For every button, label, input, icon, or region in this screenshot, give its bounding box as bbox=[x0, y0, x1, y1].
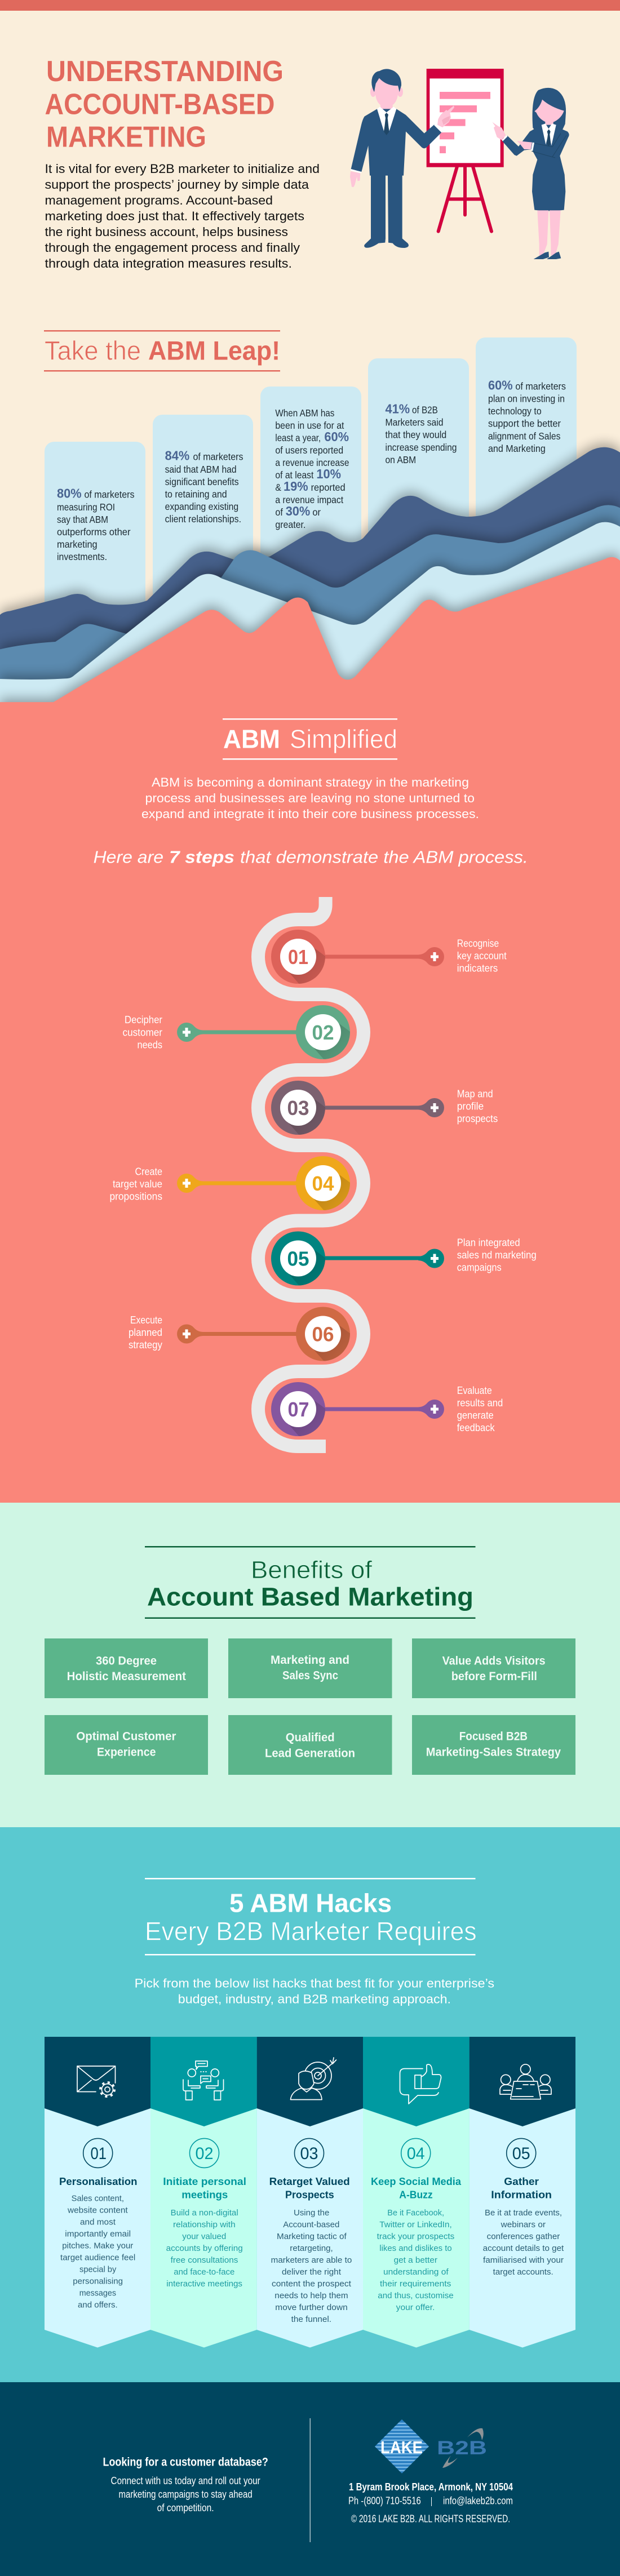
heading: Take the ABM Leap: Take the bbox=[45, 336, 141, 365]
intro paragraph: marketing does just that. It effectively targets bbox=[45, 209, 304, 223]
step 03: profile bbox=[457, 1100, 484, 1112]
hack 03: Retarget Valued Prospects: content the prospect bbox=[272, 2280, 351, 2289]
step 04 bbox=[109, 1156, 358, 1225]
hack 02: Initiate personal meetings: interactive meetings bbox=[166, 2280, 242, 2289]
benefit: Focused B2B Marketing-Sales Strategy bbox=[412, 1715, 575, 1775]
intro paragraph: support the prospects’ journey by simple data bbox=[45, 177, 309, 192]
hack 05: Gather Information: familiarised with your bbox=[483, 2256, 564, 2265]
hack 05: Gather Information: 05 bbox=[512, 2144, 530, 2163]
step 02: needs bbox=[138, 1039, 162, 1051]
card: 60% 10% 19% 30%: 10% bbox=[316, 467, 341, 481]
hack 01: Personalisation: Sales content, bbox=[72, 2194, 124, 2203]
hack 04: Keep Social Media A-Buzz: your offer. bbox=[396, 2303, 435, 2312]
card: 84%: 84% bbox=[165, 448, 189, 463]
intro paragraph bbox=[45, 162, 320, 270]
hack 05: Gather Information bbox=[470, 2037, 575, 2347]
card: 60% 10% 19% 30%: a revenue impact bbox=[275, 494, 343, 505]
card: 80% bbox=[45, 442, 145, 667]
hack 03: Retarget Valued Prospects: move further down bbox=[275, 2303, 348, 2312]
contact details bbox=[348, 2481, 513, 2524]
icon: flip chart bbox=[427, 69, 504, 232]
hack 03: Retarget Valued Prospects: Using the bbox=[294, 2209, 329, 2218]
section background: intro cream bbox=[0, 0, 620, 732]
subheading: 7 steps: Here are bbox=[94, 847, 163, 867]
benefit: Marketing and Sales Sync bbox=[228, 1638, 392, 1698]
hack 05: Gather Information: conferences gather bbox=[487, 2232, 560, 2241]
intro paragraph: through data integration measures results. bbox=[45, 256, 292, 270]
card: 60% 10% 19% 30%: reported bbox=[311, 482, 346, 493]
card: 60% 10% 19% 30%: a revenue increase bbox=[275, 457, 349, 468]
hack 03: Retarget Valued Prospects: marketers are able to bbox=[271, 2256, 352, 2265]
intro paragraph: management programs. Account-based bbox=[45, 193, 273, 207]
subheading: 7 steps bbox=[94, 847, 528, 867]
step 01: Recognise bbox=[457, 938, 499, 949]
panel: ABM Simplified bbox=[0, 716, 620, 1503]
hack 01: Personalisation: personalising bbox=[73, 2277, 123, 2286]
card: 84%: said that ABM had bbox=[165, 464, 237, 475]
benefit: Optimal Customer Experience: Experience bbox=[97, 1746, 156, 1759]
hack 02: Initiate personal meetings: your valued bbox=[182, 2232, 226, 2241]
step 01: indicaters bbox=[457, 962, 498, 974]
card: 41% bbox=[368, 358, 469, 584]
hack 05: Gather Information: target accounts. bbox=[493, 2268, 553, 2277]
hack 01: Personalisation: website content bbox=[67, 2206, 128, 2215]
hack 04: Keep Social Media A-Buzz: Be it Facebook, bbox=[387, 2209, 444, 2218]
panel: Benefits bbox=[0, 1503, 620, 1827]
benefit: Marketing and Sales Sync: Sales Sync bbox=[282, 1669, 338, 1682]
step 07: feedback bbox=[457, 1422, 495, 1433]
step 07: Evaluate bbox=[457, 1384, 492, 1396]
hack 04: Keep Social Media A-Buzz: understanding of bbox=[383, 2268, 449, 2277]
card: 84%: client relationships. bbox=[165, 513, 241, 525]
step 06: Execute bbox=[130, 1314, 162, 1326]
card: 80%: investments. bbox=[57, 551, 107, 562]
heading: ABM Simplified bbox=[223, 718, 397, 760]
hack 05: Gather Information: Be it at trade events, bbox=[485, 2209, 562, 2218]
card: 41%: 41% bbox=[386, 402, 410, 416]
card: 60% alignment: alignment of Sales bbox=[488, 430, 561, 442]
hack 05: Gather Information: webinars or bbox=[501, 2220, 546, 2229]
card: 84%: significant benefits bbox=[165, 476, 239, 487]
hack 03: Retarget Valued Prospects: the funnel. bbox=[291, 2315, 331, 2324]
hack 03: Retarget Valued Prospects bbox=[257, 2037, 363, 2347]
step 03: 03 bbox=[287, 1096, 309, 1120]
card: 60% alignment: 60% bbox=[488, 378, 513, 393]
hack 02: Initiate personal meetings: 02 bbox=[195, 2144, 213, 2163]
hack 01: Personalisation: Personalisation bbox=[59, 2176, 138, 2187]
card: 84%: to retaining and bbox=[165, 488, 227, 500]
heading: ABM Simplified: Simplified bbox=[290, 725, 397, 754]
heading: 5 ABM Hacks bbox=[145, 1878, 477, 1955]
hack 01: Personalisation bbox=[45, 2037, 150, 2347]
hack 04: Keep Social Media A-Buzz: their requirements bbox=[380, 2280, 451, 2289]
hack 03: Retarget Valued Prospects: Retarget Valued bbox=[269, 2176, 350, 2187]
card: 80%: 80% bbox=[57, 486, 82, 501]
heading: Take the ABM Leap bbox=[44, 330, 280, 372]
chart: layered mountains bbox=[0, 447, 620, 728]
intro paragraph: through the engagement process and finally bbox=[45, 241, 300, 255]
hack 03: Retarget Valued Prospects: needs to help them bbox=[274, 2291, 348, 2300]
stat cards bbox=[45, 337, 577, 667]
step 02: Decipher bbox=[125, 1014, 162, 1025]
card: 60% 10% 19% 30%: of at least bbox=[275, 469, 314, 481]
hack 05: Gather Information: account details to get bbox=[483, 2244, 564, 2253]
hack 02: Initiate personal meetings: meetings bbox=[181, 2189, 228, 2200]
card: 60% alignment: of marketers bbox=[515, 381, 566, 392]
step 07 bbox=[271, 1382, 503, 1451]
panel: Take the ABM Leap bbox=[0, 330, 620, 728]
hack 01: Personalisation: messages bbox=[79, 2289, 116, 2298]
step 02: customer bbox=[123, 1027, 162, 1038]
hack 04: Keep Social Media A-Buzz: A-Buzz bbox=[399, 2189, 433, 2200]
hack 01: Personalisation: and most bbox=[80, 2218, 116, 2227]
call to action: of competition. bbox=[157, 2502, 214, 2513]
logo: Lake B2B: B2B bbox=[437, 2437, 487, 2459]
step 05: Plan integrated bbox=[457, 1237, 520, 1249]
benefit: 360 Degree Holistic Measurement: 360 Degree bbox=[96, 1655, 157, 1668]
card: 60% 10% 19% 30% bbox=[260, 387, 361, 612]
step 04: target value bbox=[113, 1178, 162, 1189]
title bbox=[45, 55, 284, 153]
intro text: budget, industry, and B2B marketing approach. bbox=[178, 1992, 451, 2006]
icon: envelope with gear bbox=[77, 2066, 115, 2097]
card: 80%: say that ABM bbox=[57, 514, 108, 525]
card: 60% alignment: plan on investing in bbox=[488, 393, 565, 405]
card: 41%: Marketers said bbox=[386, 417, 443, 428]
card: 60% 10% 19% 30%: of bbox=[275, 507, 283, 518]
benefit: Qualified Lead Generation: Lead Generation bbox=[265, 1747, 355, 1760]
benefit: Qualified Lead Generation bbox=[228, 1715, 392, 1775]
card: 60% alignment bbox=[476, 337, 577, 563]
intro paragraph: the right business account, helps business bbox=[45, 225, 288, 239]
card: 60% 10% 19% 30%: 19% bbox=[284, 479, 308, 494]
hack 03: Retarget Valued Prospects: Marketing tactic of bbox=[277, 2232, 347, 2241]
hack 04: Keep Social Media A-Buzz: Twitter or LinkedIn, bbox=[379, 2220, 452, 2229]
intro text bbox=[135, 1976, 494, 2006]
heading: 5 ABM Hacks: Every B2B Marketer Requires bbox=[145, 1916, 477, 1946]
hack 03: Retarget Valued Prospects: 03 bbox=[300, 2144, 318, 2163]
panel: footer bbox=[0, 2382, 620, 2576]
step 02: 02 bbox=[312, 1021, 334, 1044]
card: 60% 10% 19% 30%: 30% bbox=[286, 504, 310, 518]
benefit: Focused B2B Marketing-Sales Strategy: Marketing-Sales Strategy bbox=[426, 1746, 561, 1759]
hack 02: Initiate personal meetings: Initiate personal bbox=[163, 2176, 246, 2187]
intro text: Pick from the below list hacks that best fit for your enterprise’s bbox=[135, 1976, 494, 1990]
step 03: prospects bbox=[457, 1113, 498, 1125]
card: 41%: increase spending bbox=[386, 442, 457, 453]
card: 60% 10% 19% 30%: 60% bbox=[324, 429, 349, 444]
step 01: 01 bbox=[288, 945, 308, 969]
step 07: 07 bbox=[287, 1398, 309, 1421]
card: 60% alignment: and Marketing bbox=[488, 443, 546, 454]
hack 01: Personalisation: importantly email bbox=[65, 2229, 131, 2239]
panel: 5 ABM Hacks bbox=[0, 1827, 620, 2382]
hack 03: Retarget Valued Prospects: Prospects bbox=[285, 2189, 334, 2200]
icon: people meeting at table bbox=[183, 2061, 223, 2100]
step 05: 05 bbox=[287, 1247, 309, 1270]
hack 02: Initiate personal meetings: relationship with bbox=[173, 2220, 236, 2229]
step 01: key account bbox=[457, 950, 507, 962]
icon: woman bbox=[492, 88, 569, 259]
card: 60% 10% 19% 30%: or bbox=[312, 507, 321, 518]
heading: ABM Simplified: ABM bbox=[223, 725, 280, 754]
hack 04: Keep Social Media A-Buzz: track your prospects bbox=[377, 2232, 454, 2241]
icon: team around table bbox=[500, 2064, 551, 2099]
card: 84%: of marketers bbox=[193, 451, 243, 463]
step 07: generate bbox=[457, 1409, 494, 1421]
intro paragraph: It is vital for every B2B marketer to initialize and bbox=[45, 162, 320, 176]
card: 60% 10% 19% 30%: of users reported bbox=[275, 445, 343, 456]
card: 60% 10% 19% 30%: When ABM has bbox=[275, 407, 335, 419]
card: 80%: of marketers bbox=[85, 489, 135, 500]
step 05 bbox=[271, 1232, 537, 1300]
heading: Benefits of Account Based Marketing bbox=[145, 1546, 476, 1619]
hack 01: Personalisation: pitches. Make your bbox=[62, 2241, 133, 2250]
icon: man bbox=[350, 69, 454, 248]
hack 02: Initiate personal meetings: accounts by offering bbox=[166, 2244, 243, 2253]
contact details: Ph -(800) 710-5516 bbox=[348, 2495, 421, 2506]
step 03: Map and bbox=[457, 1088, 493, 1100]
subheading: 7 steps: that demonstrate the ABM process. bbox=[240, 847, 528, 867]
contact details: © 2016 LAKE B2B. ALL RIGHTS RESERVED. bbox=[351, 2513, 510, 2524]
hack 03: Retarget Valued Prospects: deliver the right bbox=[282, 2268, 341, 2277]
step 04: propositions bbox=[109, 1190, 162, 1202]
card: 60% 10% 19% 30%: & bbox=[275, 482, 281, 493]
hack 01: Personalisation: special by bbox=[79, 2265, 117, 2274]
hack 02: Initiate personal meetings: Build a non-digital bbox=[171, 2209, 238, 2218]
card: 80%: marketing bbox=[57, 539, 98, 550]
card: 60% 10% 19% 30%: least a year, bbox=[275, 432, 321, 443]
paragraph: ABM is becoming a dominant strategy in the marketing bbox=[152, 775, 469, 789]
call to action: Looking for a customer database? bbox=[103, 2456, 268, 2469]
illustration: two presenters and flip chart bbox=[350, 69, 569, 259]
hack 03: Retarget Valued Prospects: Account-based bbox=[283, 2220, 339, 2229]
heading: Benefits of Account Based Marketing: Account Based Marketing bbox=[147, 1582, 473, 1611]
step 06 bbox=[129, 1307, 358, 1376]
hack 04: Keep Social Media A-Buzz bbox=[363, 2037, 470, 2347]
step 06: strategy bbox=[129, 1339, 163, 1351]
step 04: 04 bbox=[312, 1172, 334, 1195]
step 05: sales nd marketing bbox=[457, 1249, 537, 1261]
hack 04: Keep Social Media A-Buzz: likes and dislikes to bbox=[379, 2244, 452, 2253]
benefit: 360 Degree Holistic Measurement: Holistic Measurement bbox=[67, 1670, 186, 1683]
title: UNDERSTANDING bbox=[46, 55, 284, 88]
benefit: Optimal Customer Experience bbox=[45, 1715, 208, 1775]
benefit: Marketing and Sales Sync: Marketing and bbox=[271, 1654, 349, 1667]
hack 05: Gather Information: Information bbox=[491, 2189, 552, 2200]
hack 01: Personalisation: target audience feel bbox=[60, 2253, 135, 2262]
benefit: Focused B2B Marketing-Sales Strategy: Focused B2B bbox=[459, 1730, 528, 1743]
card: 41%: that they would bbox=[386, 429, 446, 441]
heading: Take the ABM Leap: ABM Leap! bbox=[148, 336, 280, 365]
benefit: 360 Degree Holistic Measurement bbox=[45, 1638, 208, 1698]
hack 03: Retarget Valued Prospects: retargeting, bbox=[290, 2244, 333, 2253]
card: 41%: on ABM bbox=[386, 454, 416, 465]
step 04: Create bbox=[135, 1165, 162, 1177]
logo: Lake B2B bbox=[372, 2419, 487, 2473]
benefit: Value Adds Visitors before Form-Fill bbox=[412, 1638, 575, 1698]
benefit: Value Adds Visitors before Form-Fill: before Form-Fill bbox=[451, 1670, 537, 1683]
paragraph: expand and integrate it into their core business processes. bbox=[141, 807, 479, 821]
subheading: 7 steps: 7 steps bbox=[169, 847, 234, 867]
step 05: campaigns bbox=[457, 1261, 502, 1273]
call to action: marketing campaigns to stay ahead bbox=[118, 2489, 253, 2500]
icon: thumbs up speech bubble bbox=[400, 2064, 441, 2104]
hack 04: Keep Social Media A-Buzz: get a better bbox=[394, 2256, 437, 2265]
paragraph: process and businesses are leaving no stone unturned to bbox=[145, 791, 475, 805]
step 06: planned bbox=[129, 1326, 162, 1338]
hack 02: Initiate personal meetings: and face-to-face bbox=[174, 2268, 234, 2277]
card: 80%: measuring ROI bbox=[57, 501, 115, 513]
card: 60% 10% 19% 30%: greater. bbox=[275, 519, 305, 530]
hack 01: Personalisation: and offers. bbox=[78, 2300, 118, 2309]
heading: Benefits of Account Based Marketing: Benefits of bbox=[251, 1556, 373, 1584]
logo: Lake B2B: LAKE bbox=[380, 2437, 423, 2457]
card: 41%: of B2B bbox=[412, 405, 438, 416]
card: 84% bbox=[153, 415, 253, 640]
contact details: info@lakeb2b.com bbox=[443, 2495, 513, 2506]
hack 05: Gather Information: Gather bbox=[504, 2176, 539, 2187]
card: 60% 10% 19% 30%: been in use for at bbox=[275, 420, 344, 431]
call to action bbox=[103, 2456, 268, 2513]
heading: 5 ABM Hacks: 5 ABM Hacks bbox=[229, 1888, 392, 1917]
step 03 bbox=[271, 1081, 498, 1150]
call to action: Connect with us today and roll out your bbox=[110, 2475, 260, 2486]
hack 04: Keep Social Media A-Buzz: 04 bbox=[407, 2144, 425, 2163]
card: 60% alignment: support the better bbox=[488, 418, 561, 429]
title: MARKETING bbox=[46, 121, 206, 153]
hack 01: Personalisation: 01 bbox=[90, 2144, 107, 2163]
hack 02: Initiate personal meetings: free consultations bbox=[171, 2256, 238, 2265]
step 07: results and bbox=[457, 1397, 503, 1409]
card: 60% alignment: technology to bbox=[488, 406, 542, 417]
step 01 bbox=[271, 930, 507, 999]
paragraph bbox=[141, 775, 479, 821]
hack 04: Keep Social Media A-Buzz: Keep Social Media bbox=[371, 2176, 462, 2187]
benefit: Optimal Customer Experience: Optimal Customer bbox=[76, 1730, 176, 1743]
icon: target with person bbox=[291, 2058, 336, 2099]
step 02 bbox=[123, 1005, 358, 1074]
hack 04: Keep Social Media A-Buzz: and thus, customise bbox=[378, 2291, 454, 2300]
benefit: Value Adds Visitors before Form-Fill: Value Adds Visitors bbox=[442, 1654, 546, 1667]
benefit: Qualified Lead Generation: Qualified bbox=[286, 1731, 335, 1744]
card: 80%: outperforms other bbox=[57, 526, 131, 538]
hack 02: Initiate personal meetings bbox=[150, 2037, 257, 2347]
title: ACCOUNT-BASED bbox=[45, 88, 275, 121]
step 06: 06 bbox=[312, 1323, 334, 1345]
winding road bbox=[258, 897, 364, 1446]
top bar bbox=[0, 0, 620, 11]
card: 84%: expanding existing bbox=[165, 501, 238, 512]
contact details: 1 Byram Brook Place, Armonk, NY 10504 bbox=[349, 2481, 513, 2493]
